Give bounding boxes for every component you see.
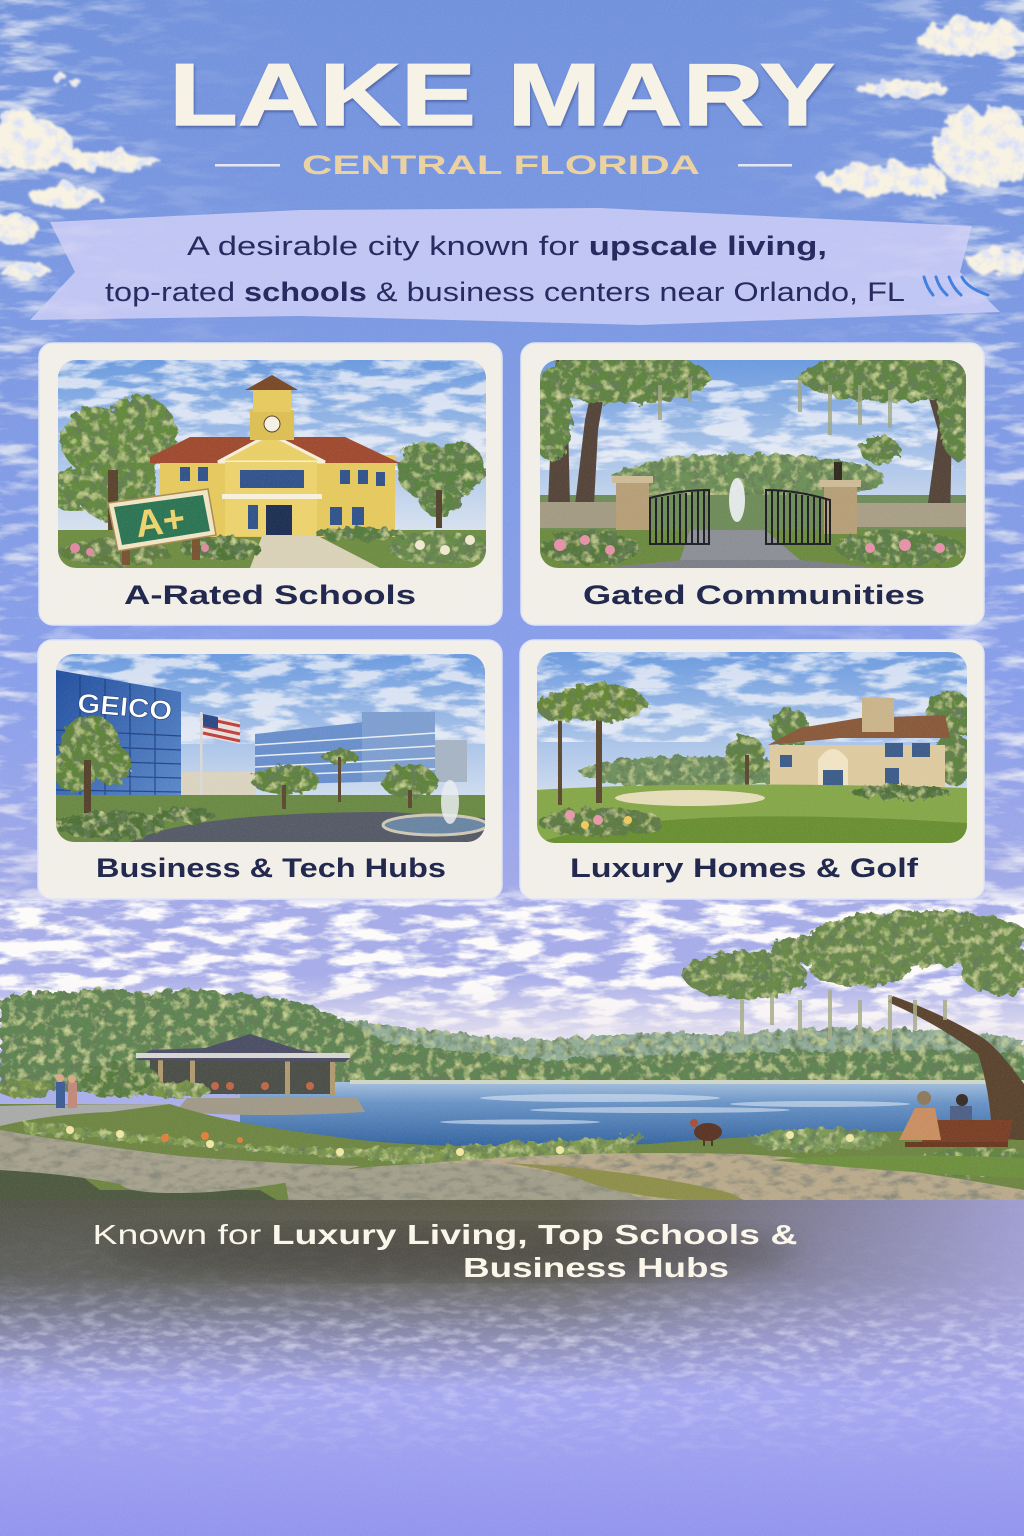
near shore ground xyxy=(0,1104,1024,1208)
near treeline xyxy=(0,989,1024,1092)
horizon glow xyxy=(0,975,1024,1050)
label: Business & Tech Hubs xyxy=(96,853,446,883)
label: Gated Communities xyxy=(583,580,925,610)
lake scene xyxy=(0,910,1024,1208)
flower border xyxy=(25,1122,1024,1177)
icon: water ripples xyxy=(924,277,988,295)
bird xyxy=(690,1119,722,1146)
label: A-Rated Schools xyxy=(124,580,416,610)
panel: Gated Communities xyxy=(521,343,984,625)
bottom caption: Known for Luxury Living, Top Schools & xyxy=(92,1219,798,1250)
subtitle: CENTRAL FLORIDA xyxy=(302,150,700,180)
sign: A+ xyxy=(108,489,216,565)
pavilion xyxy=(136,1034,365,1115)
title: LAKE MARY xyxy=(169,45,835,144)
golf scene xyxy=(537,652,979,843)
gate scene xyxy=(532,352,980,568)
clouds: top left xyxy=(0,72,160,278)
business scene: GEICO xyxy=(76,688,173,726)
panel: Luxury Homes & Golf xyxy=(520,640,984,899)
bottom caption xyxy=(92,1219,800,1283)
ground shadow xyxy=(0,1160,290,1208)
bench with people xyxy=(899,1091,1013,1147)
footpath xyxy=(380,1153,1024,1206)
business scene xyxy=(53,654,487,842)
school scene xyxy=(50,360,492,568)
clouds: top right xyxy=(818,18,1024,275)
flag xyxy=(203,714,240,744)
lake water xyxy=(240,1082,1024,1152)
sign: A+: A+ xyxy=(133,498,188,546)
intro ribbon: top-rated schools & business centers near Orlando, FL xyxy=(105,277,905,307)
stone wall xyxy=(0,1130,360,1193)
intro ribbon: A desirable city known for upscale living, xyxy=(187,231,827,261)
panel: A-Rated Schools xyxy=(39,343,502,625)
lower cloud reflections xyxy=(0,1272,1024,1446)
panel: Business & Tech Hubs xyxy=(38,640,502,899)
walkers xyxy=(56,1074,77,1108)
side cloud texture xyxy=(0,0,1024,900)
bottom caption: Business Hubs xyxy=(463,1252,729,1283)
lower fade xyxy=(0,1200,1024,1390)
intro ribbon xyxy=(30,208,1000,325)
oak tree xyxy=(683,910,1024,1140)
cloud band above the lake xyxy=(0,885,1024,1055)
far hills xyxy=(330,1016,1024,1110)
label: Luxury Homes & Golf xyxy=(570,853,919,883)
